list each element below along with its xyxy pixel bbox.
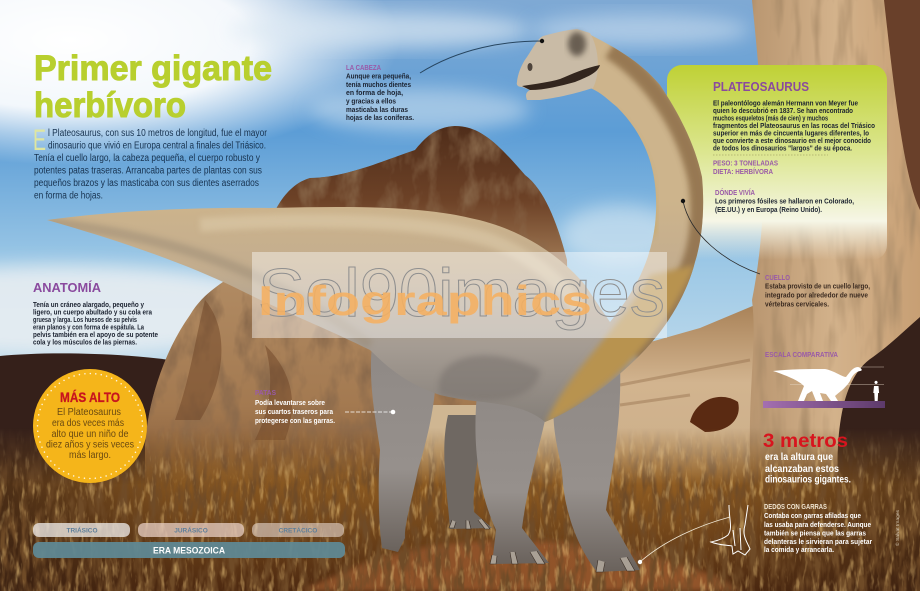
annotation: dedos con garras [638, 504, 872, 564]
comparative scale: ESCALA COMPARATIVA [765, 352, 838, 359]
intro text block: en forma de hojas. [34, 190, 103, 202]
intro text block [33, 124, 268, 202]
panel text: plateosaurus: que convierte a este dinosaurio en el mejor conocido [713, 138, 871, 145]
annotation: la cabeza [346, 39, 544, 122]
illustration: Plateosaurus [47, 29, 703, 572]
annotation: dedos con garras: las usaba para defenderse. Aunque [764, 522, 871, 529]
anatomy text block: eran planos y con forma de espátula. La [33, 324, 144, 332]
feet claws [449, 519, 635, 572]
intro text block: potentes patas traseras. Arrancaba partes de plantas con sus [34, 166, 262, 176]
background: dry grass ground [0, 432, 920, 591]
watermark: Infographics [258, 277, 592, 324]
annotation: la cabeza: tenía muchos dientes [346, 82, 411, 89]
timeline [33, 523, 345, 558]
callout: 3 metros: 3 metros [763, 431, 848, 452]
callout: 3 metros [763, 431, 851, 486]
panel text: plateosaurus: El paleontólogo alemán Hermann von Meyer fue [713, 100, 858, 108]
annotation: dedos con garras: DEDOS CON GARRAS [764, 504, 827, 511]
pale sand behind legs [415, 405, 575, 500]
body, tail and neck [47, 33, 703, 422]
callout: más alto: alto que un niño de [52, 429, 129, 440]
annotation: patas [255, 390, 395, 425]
annotation: la cabeza: en forma de hoja, [346, 90, 403, 97]
anatomy text block: ANATOMÍA [33, 280, 102, 295]
callout: más alto: MÁS ALTO [60, 389, 120, 405]
panel text: plateosaurus: (EE.UU.) y en Europa (Reino Unido). [715, 207, 822, 214]
background: right cliff wall [745, 0, 920, 490]
anatomy text block: pelvis también era el apoyo de su potente [33, 332, 158, 339]
annotation: cuello: CUELLO [765, 275, 790, 282]
front right leg [554, 365, 640, 572]
panel text: plateosaurus: DÓNDE VIVÍA [715, 188, 755, 197]
panel text: plateosaurus: muchos esqueletos (más de cien) y muchos [713, 116, 828, 122]
callout: 3 metros: era la altura que [765, 452, 833, 463]
anatomy text block: ligero, un cuerpo abultado y su cola era [33, 310, 152, 316]
callout: más alto: era dos veces más [52, 418, 124, 429]
period: cretácico [252, 523, 344, 537]
panel text: plateosaurus: de todos los dinosaurios "largos" de su época. [713, 146, 852, 152]
title: Primer gigante [34, 49, 272, 88]
icon: clawed foot outline [711, 505, 750, 555]
annotation: la cabeza: hojas de las coníferas. [346, 115, 414, 122]
panel text: plateosaurus [713, 79, 875, 214]
annotation: patas: sus cuartos traseros para [255, 409, 333, 416]
annotation: dedos con garras: también se piensa que las garras [764, 530, 866, 538]
panel text: plateosaurus: DIETA: HERBÍVORA [713, 167, 773, 176]
front left leg [475, 385, 549, 564]
annotation: patas: protegerse con las garras. [255, 418, 335, 425]
panel text: plateosaurus: quien lo descubrió en 1837. Se han encontrado [713, 108, 853, 115]
comparative scale [763, 352, 885, 408]
intro text block: l Plateosaurus, con sus 10 metros de longitud, fue el mayor [48, 128, 268, 139]
callout: más alto: diez años y seis veces [46, 440, 134, 450]
icon: dinosaur silhouette [773, 367, 862, 401]
background: sky and clouds [0, 0, 920, 440]
title: herbívoro [34, 86, 186, 125]
annotation: patas: Podía levantarse sobre [255, 400, 325, 407]
annotation: patas: PATAS [255, 390, 276, 397]
anatomy text block [33, 280, 158, 346]
panel text: plateosaurus: superior en más de cincuenta lugares diferentes, lo [713, 130, 869, 138]
credit: © Salvat Images [894, 509, 900, 546]
period: triásico: TRIÁSICO [66, 526, 98, 534]
annotation: dedos con garras: Contaba con garras afiladas que [764, 513, 861, 520]
panel text: plateosaurus: PLATEOSAURUS [713, 79, 809, 94]
era bar: ERA MESOZOICA [153, 546, 225, 556]
period: jurásico: JURÁSICO [174, 526, 208, 534]
neck and body shading [47, 50, 699, 425]
intro text block: dinosaurio que vivió en Europa central a finales del Triásico. [48, 140, 266, 152]
anatomy text block: cola y los músculos de las piernas. [33, 340, 137, 346]
period: triásico [33, 523, 130, 537]
annotation: cuello: Estaba provisto de un cuello largo, [765, 284, 870, 290]
callout: más alto: más largo. [69, 450, 111, 461]
panel text: plateosaurus: Los primeros fósiles se hallaron en Colorado, [715, 198, 854, 206]
callout: más alto: El Plateosaurus [57, 407, 121, 418]
annotation: la cabeza: y gracias a ellos [346, 98, 396, 106]
far hind leg [444, 415, 492, 529]
annotation: cuello: vértebras cervicales. [765, 302, 829, 308]
period: cretácico: CRETÁCICO [279, 526, 317, 534]
annotation: cuello [681, 199, 870, 308]
watermark: Sol90images [258, 255, 665, 331]
callout: 3 metros: dinosaurios gigantes. [765, 474, 851, 486]
title [34, 49, 272, 125]
intro text block: pequeños brazos y las masticaba con sus dientes aserrados [34, 178, 259, 189]
callout: 3 metros: alcanzaban estos [765, 464, 839, 475]
background: dark hills [0, 353, 170, 520]
anatomy text block: Tenía un cráneo alargado, pequeño y [33, 302, 144, 309]
annotation: dedos con garras: la comida y arrancarla. [764, 547, 834, 554]
period: jurásico [138, 523, 244, 537]
background: central rock formation [145, 125, 575, 500]
annotation: la cabeza: Aunque era pequeña, [346, 74, 411, 80]
annotation: la cabeza: masticaba las duras [346, 107, 408, 114]
intro text block: Tenía el cuello largo, la cabeza pequeña, el cuerpo robusto y [34, 153, 260, 164]
background: middle cliff [560, 305, 760, 500]
era bar [33, 542, 345, 558]
icon: human silhouette [873, 381, 879, 401]
near hind leg [371, 345, 436, 552]
callout: más alto [33, 369, 147, 483]
anatomy text block: gruesa y larga. Los huesos de su pelvis [33, 317, 137, 324]
panel text: plateosaurus: PESO: 3 TONELADAS [713, 160, 778, 168]
panel background: plateosaurus [667, 65, 887, 260]
annotation: cuello: integrado por alrededor de nueve [765, 292, 868, 300]
panel text: plateosaurus: fragmentos del Plateosaurus en las rocas del Triásico [713, 123, 875, 130]
annotation: dedos con garras: delanteras le sirvieran para sujetar [764, 539, 872, 546]
annotation: la cabeza: LA CABEZA [346, 65, 381, 72]
head [517, 29, 598, 100]
drop cap: E [33, 124, 46, 157]
